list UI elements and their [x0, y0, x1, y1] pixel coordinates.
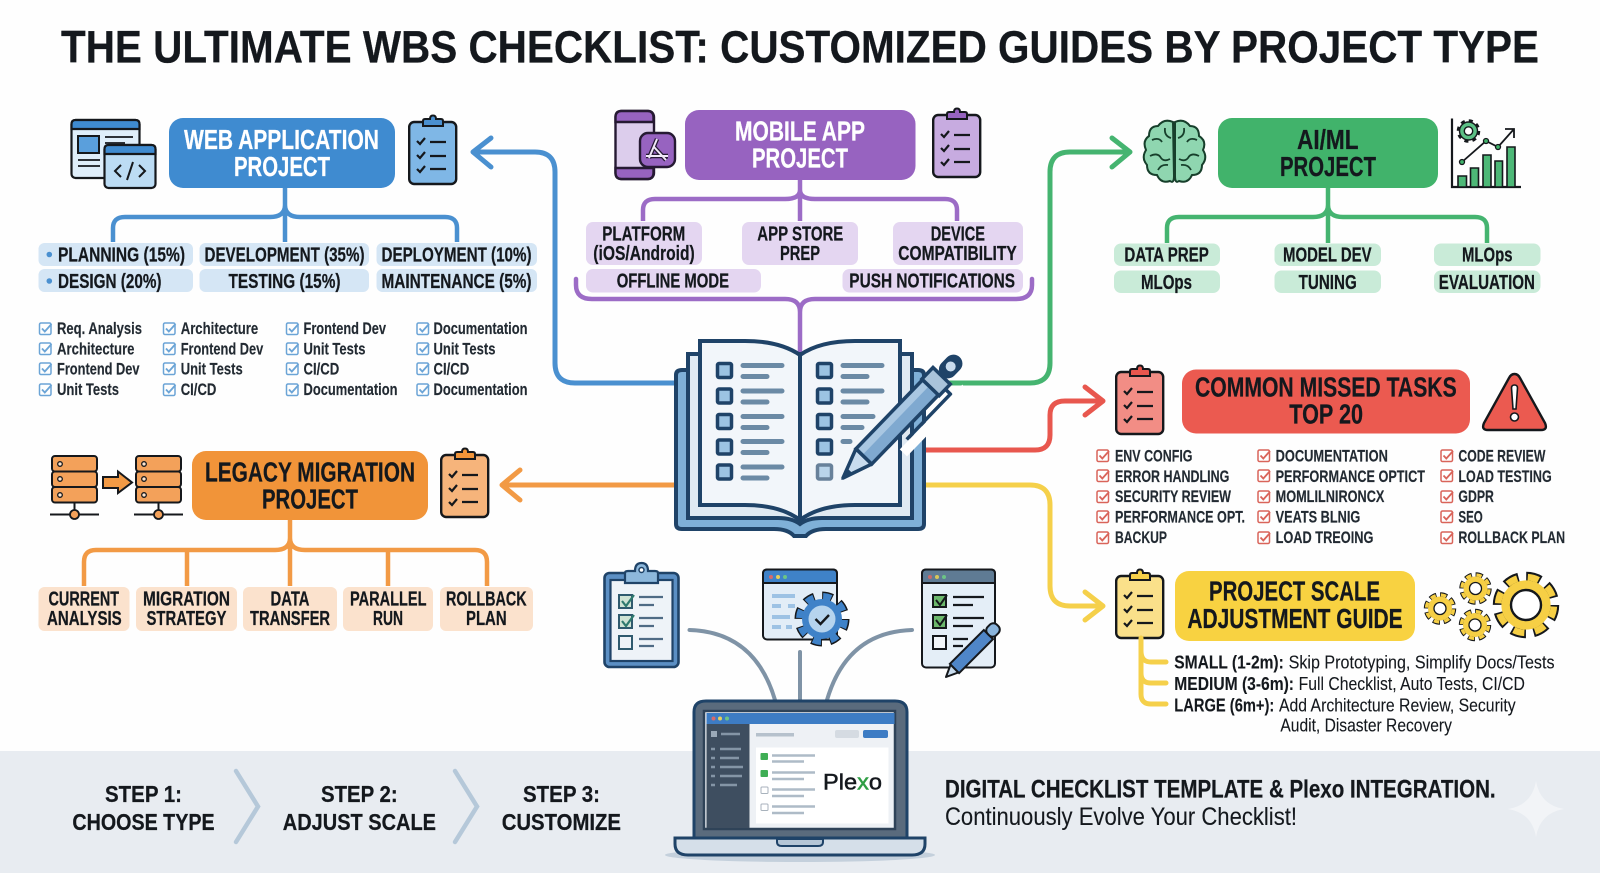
icon: sparkle: [1508, 781, 1564, 837]
icon: browser with gear: [763, 570, 844, 642]
checklist: web tasks: Frontend Dev: [57, 360, 140, 378]
step chips: legacy: TRANSFER: [250, 607, 330, 630]
screen: [704, 711, 895, 829]
icon: brain: [1144, 121, 1205, 182]
checklist: web tasks: Frontend Dev: [304, 319, 386, 338]
checklist: web tasks: Unit Tests: [57, 380, 119, 399]
feature chips: mobile: [586, 222, 1023, 293]
heading box: ai/ml project: [1218, 118, 1438, 188]
step chips: legacy: DATA: [270, 588, 310, 610]
phase chips: PLANNING (15%): [58, 244, 185, 266]
chevron 2: [455, 771, 477, 842]
checklist: missed tasks: GDPR: [1458, 487, 1494, 506]
checklist: missed tasks: SECURITY REVIEW: [1115, 487, 1232, 506]
heading box: legacy migration project: PROJECT: [262, 484, 358, 514]
checklist: web tasks: Architecture: [57, 339, 134, 358]
checklist: web tasks: Req. Analysis: [57, 319, 142, 338]
panel: mobile app project: [586, 108, 1023, 293]
step 1: [72, 781, 215, 835]
phase chips: MAINTENANCE (5%): [382, 270, 532, 293]
feature chips: mobile: DEVICE: [931, 223, 985, 246]
panel: common missed tasks: [1097, 366, 1565, 547]
step chips: legacy: MIGRATION: [143, 588, 230, 610]
heading box: mobile app project: [685, 110, 916, 180]
stage chips: ai/ml: [1114, 244, 1540, 294]
checklist: missed tasks: PERFORMANCE OPT.: [1115, 508, 1245, 526]
laptop with plexo: [665, 701, 935, 862]
icon: red clipboard: [1116, 366, 1163, 434]
heading box: legacy migration project: LEGACY MIGRATION: [205, 457, 415, 488]
arrow: to common missed tasks: [926, 387, 1103, 450]
icon: purple clipboard: [933, 108, 980, 177]
step 3: STEP 3:: [523, 781, 600, 807]
checklist in app: [760, 753, 815, 813]
step chips: legacy: STRATEGY: [146, 607, 227, 630]
step 2: ADJUST SCALE: [283, 809, 436, 835]
stage chips: ai/ml: MODEL DEV: [1283, 244, 1372, 267]
text block: scale levels: LARGE (6m+):: [1174, 695, 1274, 716]
icon: browser windows: [72, 120, 156, 188]
checklist: web tasks: Frontend Dev: [181, 339, 264, 358]
checklist: missed tasks: CODE REVIEW: [1458, 446, 1546, 466]
feature chips: mobile: PREP: [780, 242, 820, 265]
connector: mobile bracket to book: [576, 279, 1032, 352]
laptop base: [675, 838, 925, 855]
checklist: web tasks: Unit Tests: [304, 339, 366, 358]
heading box: ai/ml project: AI/ML: [1297, 124, 1358, 155]
step 1: CHOOSE TYPE: [72, 809, 215, 835]
feature chips: mobile: APP STORE: [757, 223, 843, 246]
icon: server migration: [50, 456, 183, 519]
stage chips: ai/ml: MLOps: [1462, 244, 1512, 267]
checklist: missed tasks: LOAD TESTING: [1458, 467, 1552, 486]
stage chips: ai/ml: TUNING: [1299, 271, 1357, 294]
panel: ai/ml project: [1114, 118, 1540, 294]
heading box: ai/ml project: PROJECT: [1280, 151, 1376, 182]
heading box: mobile app project: PROJECT: [752, 143, 848, 174]
icon: gear and growth chart: [1452, 118, 1521, 187]
checklist: web tasks: Architecture: [181, 319, 258, 338]
checklist: missed tasks: ERROR HANDLING: [1115, 467, 1229, 486]
laptop lid: [694, 701, 907, 838]
footer: call to action: Continuously Evolve Your Checklist!: [945, 803, 1297, 831]
icon: gears: [1426, 575, 1554, 639]
heading box: common missed tasks: COMMON MISSED TASKS: [1195, 372, 1457, 403]
panel: legacy migration project: [38, 448, 533, 631]
checklist: web tasks: CI/CD: [181, 380, 216, 399]
connector tree: legacy: [84, 520, 487, 586]
arrow: to ai/ml: [950, 138, 1130, 383]
pen: [834, 349, 978, 496]
phase chips: DEPLOYMENT (10%): [382, 244, 532, 266]
heading box: web application project: [169, 118, 395, 188]
icon: warning triangle: [1483, 374, 1546, 430]
checklist: web tasks: Documentation: [434, 380, 528, 399]
feature chips: mobile: (iOS/Android): [593, 242, 695, 265]
plexo logo: Plexo: [823, 770, 882, 794]
page stack: [688, 354, 912, 524]
right page: [800, 341, 900, 520]
icon: phone and app store: [616, 111, 675, 179]
feature chips: mobile: PUSH NOTIFICATIONS: [849, 270, 1015, 293]
icon: blue clipboard: [409, 116, 456, 184]
checklist: missed tasks: SEO: [1458, 508, 1483, 526]
checklist: web tasks: [40, 319, 528, 399]
footer: call to action: DIGITAL CHECKLIST TEMPLATE & Plexo INTEGRATION.: [945, 776, 1496, 804]
step 1: STEP 1:: [105, 781, 182, 807]
text block: scale levels: SMALL (1-2m):: [1174, 651, 1284, 672]
checklist: missed tasks: DOCUMENTATION: [1276, 446, 1388, 466]
text block: scale levels: Skip Prototyping, Simplify Docs/Tests: [1289, 651, 1554, 672]
heading box: legacy migration project: [192, 451, 428, 520]
step chips: legacy: ANALYSIS: [47, 607, 122, 630]
checklist: web tasks: Unit Tests: [434, 339, 496, 358]
connector tree: mobile: [643, 180, 957, 221]
heading box: mobile app project: MOBILE APP: [735, 116, 865, 147]
footer band: [0, 751, 1600, 873]
step 3: CUSTOMIZE: [502, 809, 621, 835]
sidebar: [706, 724, 750, 828]
checklist: missed tasks: PERFORMANCE OPTICT: [1276, 467, 1425, 486]
page checklist rows: [718, 364, 882, 479]
checklist: web tasks: Unit Tests: [181, 360, 243, 378]
checklist: missed tasks: BACKUP: [1115, 528, 1167, 547]
icon: checklist window with pen: [922, 570, 1002, 682]
checklist: web tasks: Documentation: [434, 319, 528, 338]
icon: orange clipboard: [441, 448, 488, 517]
checklist: missed tasks: LOAD TREOING: [1276, 528, 1373, 547]
heading box: project scale adjustment guide: PROJECT SCALE: [1209, 576, 1380, 607]
laptop shadow: [665, 848, 935, 862]
arrow: to project scale guide: [926, 485, 1103, 620]
heading box: project scale adjustment guide: [1175, 571, 1415, 641]
step 2: STEP 2:: [321, 781, 398, 807]
text block: scale levels: Audit, Disaster Recovery: [1280, 715, 1453, 736]
step 2: [283, 781, 436, 835]
phase chips: TESTING (15%): [228, 270, 340, 293]
feature chips: mobile: OFFLINE MODE: [617, 270, 729, 293]
toolbar: [756, 730, 888, 738]
connector: scale levels: [1141, 638, 1166, 704]
chevron 1: [236, 771, 258, 842]
step chips: legacy: RUN: [373, 607, 403, 630]
checklist: missed tasks: MOMLILNIRONCX: [1276, 487, 1385, 506]
stage chips: ai/ml: MLOps: [1141, 271, 1192, 294]
connectors from central book: [473, 138, 1130, 620]
connector tree: ai/ml: [1167, 188, 1487, 243]
stage chips: ai/ml: EVALUATION: [1439, 271, 1535, 294]
laptop notch: [777, 839, 823, 846]
checklist: missed tasks: ENV CONFIG: [1115, 446, 1192, 466]
checklist: web tasks: Documentation: [304, 380, 398, 399]
checklist: web tasks: CI/CD: [434, 360, 469, 378]
text block: scale levels: Add Architecture Review, Security: [1279, 695, 1516, 716]
panel: web application project: [38, 116, 537, 399]
heading box: web application project: WEB APPLICATION: [184, 124, 379, 155]
stage chips: ai/ml: DATA PREP: [1124, 244, 1209, 267]
step chips: legacy: CURRENT: [48, 588, 119, 610]
left page: [700, 341, 800, 520]
checklist: missed tasks: [1097, 446, 1565, 547]
arrow: to legacy migration: [502, 470, 675, 500]
book cover: [676, 370, 924, 536]
footer: process steps: [72, 771, 621, 842]
text block: scale levels: Full Checklist, Auto Tests, CI/CD: [1299, 673, 1525, 694]
heading box: web application project: PROJECT: [234, 151, 330, 182]
heading box: project scale adjustment guide: ADJUSTMENT GUIDE: [1187, 603, 1403, 634]
text block: scale levels: [1174, 651, 1554, 736]
arrow: to web application: [473, 138, 675, 383]
connector tree: web: [113, 188, 457, 242]
heading box: common missed tasks: [1182, 370, 1470, 434]
step chips: legacy: PARALLEL: [350, 588, 426, 610]
heading box: common missed tasks: TOP 20: [1289, 399, 1363, 430]
step chips: legacy: ROLLBACK: [446, 588, 527, 610]
phase chips: DESIGN (20%): [58, 270, 162, 293]
footer: call to action: [945, 776, 1496, 831]
screen header: [706, 713, 894, 724]
checklist: web tasks: CI/CD: [304, 360, 339, 378]
checklist: missed tasks: VEATS BLNIG: [1276, 508, 1360, 526]
feature chips: mobile: PLATFORM: [602, 223, 685, 246]
central open book with pen: [676, 341, 978, 536]
connectors: icons to laptop: [690, 630, 912, 700]
panel: project scale adjustment guide: [1116, 570, 1554, 736]
content card: [756, 748, 888, 824]
icon: checklist clipboard: [604, 563, 678, 667]
step 3: [502, 781, 621, 835]
text block: scale levels: MEDIUM (3-6m):: [1174, 673, 1294, 694]
phase chips: [38, 243, 537, 293]
phase chips: DEVELOPMENT (35%): [204, 244, 364, 266]
step chips: legacy: PLAN: [466, 607, 507, 630]
icon: yellow clipboard: [1116, 570, 1163, 638]
step chips: legacy: [38, 587, 533, 631]
feature chips: mobile: COMPATIBILITY: [898, 242, 1017, 265]
